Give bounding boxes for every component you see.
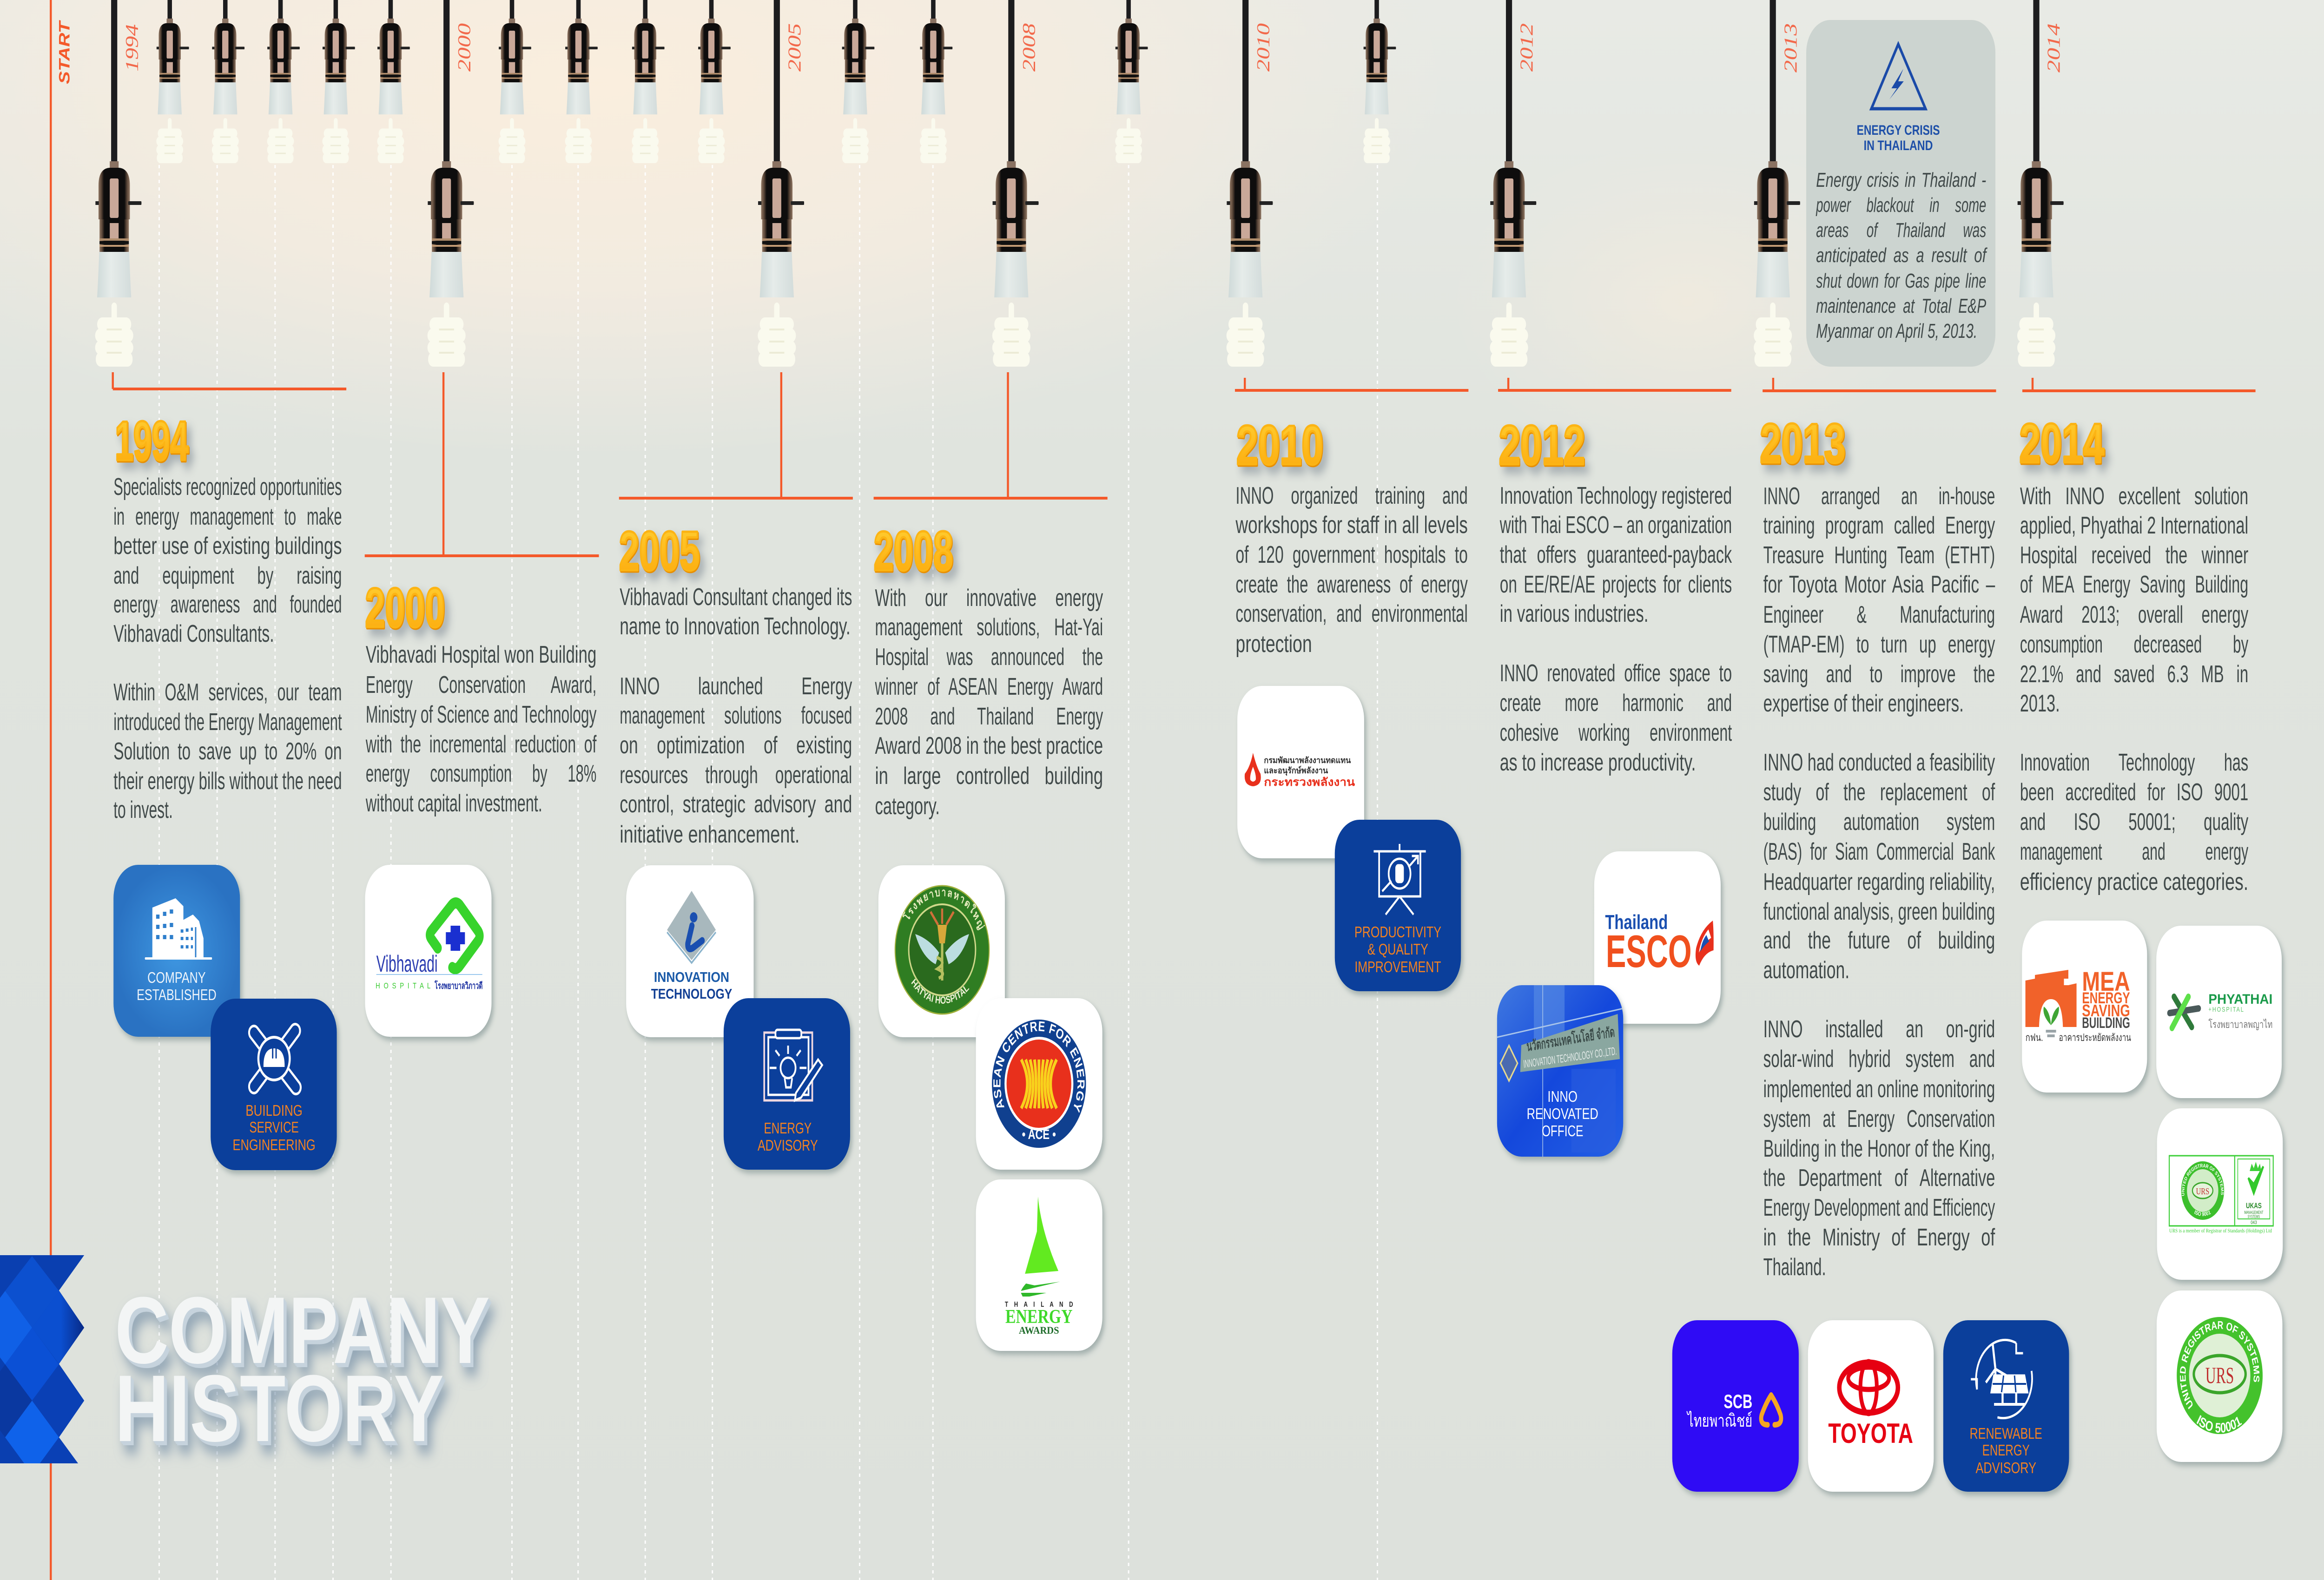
- text 2010: protection: [1235, 630, 1312, 657]
- milestone: 2012: [1497, 415, 1732, 1157]
- tile: Thailand ESCO logo: Thailand: [1605, 911, 1668, 934]
- tile: building service engineering: ENGINEERING: [233, 1137, 316, 1154]
- callout text: power blackout in some: [1816, 194, 1986, 217]
- text 1994: [113, 473, 342, 823]
- text 1994: Vibhavadi Consultants.: [113, 620, 274, 647]
- vertical year tags: 2005: [785, 23, 805, 72]
- text 2008: Hospital was announced the: [875, 643, 1103, 670]
- tile: MEA energy saving building logo: SAVING: [2082, 1001, 2130, 1020]
- tile: INNO renovated office: INNOVATION TECHNOLOGY CO.,LTD.: [1523, 1045, 1617, 1071]
- tile: ASEAN Centre for Energy logo: • ACE •: [1022, 1126, 1056, 1142]
- text 2005: initiative enhancement.: [620, 821, 799, 848]
- red connector lines: [113, 372, 2256, 556]
- tile: Vibhavadi Hospital logo: โรงพยาบาลวิภาวดี: [434, 980, 482, 991]
- heading 2005: 2005: [619, 520, 700, 582]
- milestone: 2000: [365, 577, 597, 1037]
- text 2013: expertise of their engineers.: [1763, 690, 1964, 717]
- text 2010: create the awareness of energy: [1235, 571, 1468, 598]
- tile: company established: [113, 865, 240, 1037]
- tile: Toyota logo: TOYOTA: [1828, 1418, 1913, 1449]
- text 2012: INNO renovated office space to: [1500, 659, 1732, 686]
- tile: building service engineering: SERVICE: [249, 1119, 299, 1136]
- text 1994: better use of existing buildings: [113, 532, 342, 559]
- text 2008: in large controlled building: [875, 762, 1103, 789]
- tile: INNO renovated office: OFFICE: [1542, 1123, 1583, 1140]
- text 2014: and ISO 50001; quality: [2020, 808, 2248, 835]
- callout text: Myanmar on April 5, 2013.: [1816, 320, 1977, 342]
- text 2013: solar-wind hybrid system and: [1763, 1045, 1995, 1072]
- tile: productivity and quality improvement: PRODUCTIVITY: [1354, 924, 1441, 941]
- tile: productivity and quality improvement: [1335, 820, 1461, 991]
- text 2012: Innovation Technology registered: [1500, 482, 1732, 509]
- tile: productivity and quality improvement: & QUALITY: [1367, 941, 1428, 958]
- tile: ISO 50001 certification: ISO 50001: [2195, 1412, 2243, 1436]
- text 2013: (TMAP-EM) to turn up energy: [1763, 631, 1995, 658]
- heading 2008: 2008: [874, 520, 953, 582]
- tile: Innovation Technology logo: TECHNOLOGY: [651, 985, 732, 1002]
- text 2013: Energy Development and Efficiency: [1763, 1194, 1995, 1221]
- tile: ASEAN Centre for Energy logo: ASEAN CENTRE FOR ENERGY: [991, 1018, 1087, 1115]
- tile: ISO 9001 certification: [2157, 1108, 2283, 1280]
- text 2012: in various industries.: [1500, 600, 1648, 627]
- text 2010: [1235, 482, 1468, 657]
- tile: MEA energy saving building logo: กฟน.: [2026, 1033, 2043, 1044]
- title: company history: [115, 1277, 490, 1461]
- text 2014: 22.1% and saved 6.3 MB in: [2020, 660, 2248, 687]
- tile: MEA energy saving building logo: [2022, 921, 2147, 1093]
- tile: MEA energy saving building logo: MEA: [2082, 967, 2130, 997]
- tile: energy advisory: ADVISORY: [758, 1137, 818, 1154]
- text 2014: efficiency practice categories.: [2020, 868, 2248, 895]
- text 2005: on optimization of existing: [620, 731, 852, 758]
- text 2013: system at Energy Conservation: [1763, 1105, 1995, 1132]
- text 2000: Vibhavadi Hospital won Building: [366, 641, 596, 668]
- heading 2000: 2000: [365, 577, 445, 639]
- tile: building service engineering: BUILDING: [245, 1102, 303, 1119]
- tile: Hat Yai Hospital logo: โรงพยาบาลหาดใหญ่: [901, 886, 986, 933]
- tile: INNO renovated office: [1497, 985, 1623, 1157]
- text 2000: with the incremental reduction of: [365, 731, 597, 757]
- text 2010: INNO organized training and: [1235, 482, 1468, 509]
- milestone: 2013: [1672, 413, 2069, 1492]
- tile: renewable energy advisory: ADVISORY: [1976, 1460, 2036, 1477]
- tile: Vibhavadi Hospital logo: Vibhavadi: [376, 951, 438, 977]
- tile: Innovation Technology logo: INNOVATION: [654, 968, 729, 985]
- text 2000: [365, 641, 597, 816]
- tile: Phyathai Hospital logo: +HOSPITAL: [2208, 1005, 2244, 1013]
- tile: MEA energy saving building logo: อาคารประหยัดพลังงาน: [2059, 1033, 2131, 1044]
- text 2013: study of the replacement of: [1763, 778, 1995, 805]
- text 2012: as to increase productivity.: [1500, 749, 1696, 776]
- text 2014: Innovation Technology has: [2020, 749, 2248, 776]
- milestone: 1994: [113, 410, 342, 1170]
- text 2008: [875, 584, 1103, 819]
- text 1994: Within O&M services, our team: [113, 678, 342, 705]
- text 2014: applied, Phyathai 2 International: [2020, 512, 2248, 539]
- text 2008: With our innovative energy: [875, 584, 1103, 611]
- tile: ISO 50001 certification: URS: [2205, 1363, 2234, 1388]
- text 2013: (BAS) for Siam Commercial Bank: [1763, 838, 1995, 865]
- text 2000: Energy Conservation Award,: [366, 671, 596, 698]
- callout heading: ENERGY CRISIS: [1857, 122, 1940, 138]
- text 2010: conservation, and environmental: [1235, 600, 1468, 627]
- tile: ISO 9001 certification: URS: [2196, 1186, 2209, 1197]
- text 2005: management solutions focused: [620, 702, 852, 729]
- tile: Vibhavadi Hospital logo: H O S P I T A L: [376, 981, 430, 991]
- text 2010: of 120 government hospitals to: [1235, 541, 1468, 568]
- text 2014: With INNO excellent solution: [2020, 482, 2248, 509]
- tile: SCB logo: ไทยพาณิชย์: [1686, 1411, 1752, 1431]
- tile: Thailand Energy Awards logo: ENERGY: [1005, 1305, 1072, 1327]
- text 1994: and equipment by raising: [113, 562, 342, 589]
- text 1994: in energy management to make: [113, 503, 342, 530]
- text 1994: energy awareness and founded: [113, 591, 342, 618]
- timeline start line: [49, 0, 52, 1580]
- text 2012: cohesive working environment: [1500, 719, 1732, 746]
- icon: presentation board: [1373, 844, 1426, 915]
- vertical year tags: 2014: [2044, 23, 2064, 72]
- text 2013: INNO arranged an in-house: [1763, 482, 1995, 509]
- text 2000: Ministry of Science and Technology: [366, 701, 597, 728]
- milestone: 2008: [874, 520, 1103, 1351]
- text 2014: Hospital received the winner: [2020, 541, 2248, 568]
- tile: INNO renovated office: นวัตกรรมเทคโนโลยี จำกัด: [1526, 1023, 1615, 1054]
- tile: Toyota logo: [1808, 1320, 1934, 1492]
- vertical year tags: 1994: [122, 24, 142, 72]
- tile: ISO 50001 certification: UNITED REGISTRAR OF SYSTEMS: [2179, 1319, 2261, 1411]
- tile: ISO 9001 certification: URS is a member of Registrar of Standards (Holdings) Ltd: [2169, 1228, 2272, 1234]
- tile: Department of Alternative Energy logo: [1237, 686, 1364, 858]
- tile: Thailand Energy Awards logo: [976, 1179, 1103, 1351]
- text 2012: create more harmonic and: [1500, 689, 1732, 716]
- tile: Thailand Energy Awards logo: T H A I L A N D: [1005, 1300, 1073, 1308]
- text 2005: INNO launched Energy: [620, 672, 852, 699]
- text 2013: Headquarter regarding reliability,: [1763, 868, 1995, 895]
- tile: SCB logo: [1672, 1320, 1799, 1492]
- tile: energy advisory: ENERGY: [764, 1120, 812, 1137]
- text 2008: 2008 and Thailand Energy: [875, 703, 1103, 730]
- tile: renewable energy advisory: ENERGY: [1982, 1442, 2030, 1459]
- text 1994: their energy bills without the need: [113, 767, 342, 794]
- text 2014: 2013.: [2020, 690, 2060, 717]
- heading 2013: 2013: [1760, 413, 1845, 474]
- text 1994: to invest.: [113, 796, 173, 823]
- icon: tools and hard hat: [254, 1031, 296, 1087]
- text 2012: with Thai ESCO – an organization: [1499, 511, 1732, 538]
- start label: START: [56, 20, 73, 84]
- text 2013: Thailand.: [1763, 1253, 1826, 1280]
- callout text: anticipated as a result of: [1816, 244, 1988, 267]
- tile: ISO 9001 certification: UNITED REGISTRAR OF SYSTEMS: [2181, 1163, 2224, 1196]
- text 2013: in the Ministry of Energy of: [1763, 1224, 1995, 1251]
- callout text: [1816, 169, 1988, 342]
- row of small background bulbs: [156, 0, 1396, 163]
- tile: company established: COMPANY: [147, 969, 206, 987]
- text 2013: INNO had conducted a feasibility: [1763, 749, 1995, 776]
- tile: Thailand ESCO logo: [1594, 851, 1721, 1024]
- text 2012: on EE/RE/AE projects for clients: [1500, 571, 1732, 598]
- callout text: areas of Thailand was: [1816, 219, 1986, 242]
- vertical year tags: 2000: [454, 23, 474, 72]
- tile: Vibhavadi Hospital logo: [365, 865, 491, 1037]
- text 2000: without capital investment.: [365, 790, 542, 816]
- callout: energy crisis: [1806, 20, 1995, 367]
- text 2008: winner of ASEAN Energy Award: [875, 673, 1103, 700]
- milestone: 2014: [2019, 413, 2283, 1462]
- callout heading: [1857, 122, 1940, 153]
- vertical year tags: 2010: [1253, 23, 1273, 72]
- text 2014: of MEA Energy Saving Building: [2020, 571, 2248, 598]
- tile: Department of Alternative Energy logo: กรมพัฒนาพลังงานทดแทน: [1264, 756, 1351, 765]
- tile: MEA energy saving building logo: ENERGY: [2082, 989, 2130, 1007]
- text 2013: INNO installed an on-grid: [1763, 1015, 1995, 1042]
- text 1994: introduced the Energy Management: [113, 708, 342, 735]
- text 2013: Treasure Hunting Team (ETHT): [1763, 541, 1995, 568]
- text 2013: [1763, 482, 1995, 1280]
- tile: Phyathai Hospital logo: [2156, 926, 2282, 1098]
- icon: wind turbine and solar panel: [1971, 1340, 2032, 1418]
- callout text: Energy crisis in Thailand -: [1816, 169, 1986, 191]
- text 2013: and the future of building: [1763, 927, 1995, 954]
- tile: Department of Alternative Energy logo: กระทรวงพลังงาน: [1264, 776, 1355, 789]
- text 2014: been accredited for ISO 9001: [2020, 778, 2248, 805]
- tile: Phyathai Hospital logo: PHYATHAI: [2208, 991, 2272, 1007]
- vertical year tags: 2013: [1780, 23, 1801, 72]
- tile: renewable energy advisory: [1943, 1320, 2069, 1492]
- tile: Hat Yai Hospital logo: HATYAI HOSPITAL: [910, 977, 971, 1007]
- text 1994: Solution to save up to 20% on: [113, 737, 342, 764]
- text 2014: Award 2013; overall energy: [2020, 601, 2248, 628]
- tile: company established: ESTABLISHED: [137, 987, 217, 1004]
- text 2000: energy consumption by 18%: [366, 760, 596, 787]
- text 2013: building automation system: [1763, 808, 1995, 835]
- text 2013: Building in the Honor of the King,: [1763, 1135, 1995, 1162]
- text 2005: Vibhavadi Consultant changed its: [620, 583, 852, 610]
- text 2008: management solutions, Hat-Yai: [875, 613, 1103, 640]
- callout heading: IN THAILAND: [1864, 138, 1933, 153]
- tile: Thailand ESCO logo: ESCO: [1606, 926, 1692, 977]
- vertical year tags: 2008: [1019, 23, 1039, 72]
- text 2012: [1499, 482, 1732, 776]
- icon: warning triangle with bolt: [1871, 44, 1926, 109]
- heading 1994: 1994: [115, 410, 189, 472]
- text 2013: implemented an online monitoring: [1763, 1075, 1995, 1102]
- text 2013: the Department of Alternative: [1763, 1164, 1995, 1191]
- text 2010: workshops for staff in all levels: [1235, 511, 1468, 538]
- text 2013: automation.: [1763, 956, 1849, 983]
- text 2008: category.: [875, 792, 940, 819]
- tile: MEA energy saving building logo: BUILDING: [2082, 1014, 2130, 1031]
- title: company history: HISTORY: [115, 1355, 444, 1461]
- text 2005: resources through operational: [620, 761, 852, 788]
- text 2005: name to Innovation Technology.: [620, 612, 851, 639]
- icon: buildings: [145, 898, 212, 960]
- heading 2010: 2010: [1236, 415, 1323, 476]
- title: company history: COMPANY: [115, 1277, 490, 1383]
- tile: ASEAN Centre for Energy logo: [976, 998, 1103, 1170]
- icon: clipboard with bulb and pencil: [764, 1030, 822, 1100]
- text 2013: for Toyota Motor Asia Pacific –: [1763, 571, 1995, 598]
- tile: Innovation Technology logo: [626, 865, 753, 1037]
- tile: ISO 9001 certification: SYSTEMS: [2248, 1214, 2260, 1219]
- text 2013: saving and to improve the: [1763, 660, 1995, 687]
- text 2013: Engineer & Manufacturing: [1763, 601, 1995, 628]
- text 2013: functional analysis, green building: [1763, 898, 1995, 925]
- text 2013: training program called Energy: [1763, 512, 1995, 539]
- tile: SCB logo: SCB: [1724, 1390, 1752, 1412]
- text 2005: control, strategic advisory and: [620, 790, 852, 817]
- heading 2014: 2014: [2019, 413, 2104, 474]
- tile: renewable energy advisory: RENEWABLE: [1970, 1425, 2042, 1442]
- tile: energy advisory: [724, 998, 850, 1170]
- callout text: shut down for Gas pipe line: [1816, 270, 1986, 292]
- blue diamond ribbon: [0, 1255, 84, 1463]
- vertical year tags: [122, 23, 2064, 72]
- text 2014: [2020, 482, 2248, 895]
- tile: INNO renovated office: INNO: [1547, 1088, 1578, 1106]
- tile: Phyathai Hospital logo: โรงพยาบาลพญาไท: [2208, 1018, 2272, 1031]
- milestone: 2005: [619, 520, 852, 1170]
- tile: productivity and quality improvement: IMPROVEMENT: [1354, 959, 1441, 976]
- text 1994: Specialists recognized opportunities: [113, 473, 342, 500]
- heading 2012: 2012: [1499, 415, 1585, 476]
- milestone: 2010: [1235, 415, 1468, 991]
- tile: Hat Yai Hospital logo: [878, 865, 1005, 1037]
- text 2012: that offers guaranteed-payback: [1500, 541, 1732, 568]
- vertical year tags: 2012: [1517, 23, 1537, 72]
- tile: ISO 50001 certification: [2157, 1290, 2283, 1462]
- large milestone bulbs: [95, 0, 2064, 367]
- text 2014: consumption decreased by: [2020, 631, 2248, 658]
- tile: INNO renovated office: RENOVATED: [1527, 1106, 1598, 1123]
- tile: Department of Alternative Energy logo: และอนุรักษ์พลังงาน: [1264, 766, 1328, 776]
- tile: building service engineering: [211, 999, 337, 1170]
- tile: Thailand Energy Awards logo: AWARDS: [1019, 1325, 1059, 1336]
- text 2014: management and energy: [2020, 838, 2248, 865]
- text 2005: [620, 583, 852, 848]
- tile: ISO 9001 certification: ISO 9001: [2193, 1209, 2212, 1218]
- text 2008: Award 2008 in the best practice: [875, 732, 1103, 759]
- tile: ISO 9001 certification: 043: [2251, 1220, 2257, 1225]
- tile: ISO 9001 certification: MANAGEMENT: [2244, 1210, 2264, 1215]
- tile: ISO 9001 certification: UKAS: [2246, 1202, 2262, 1211]
- callout text: maintenance at Total E&P: [1816, 295, 1986, 317]
